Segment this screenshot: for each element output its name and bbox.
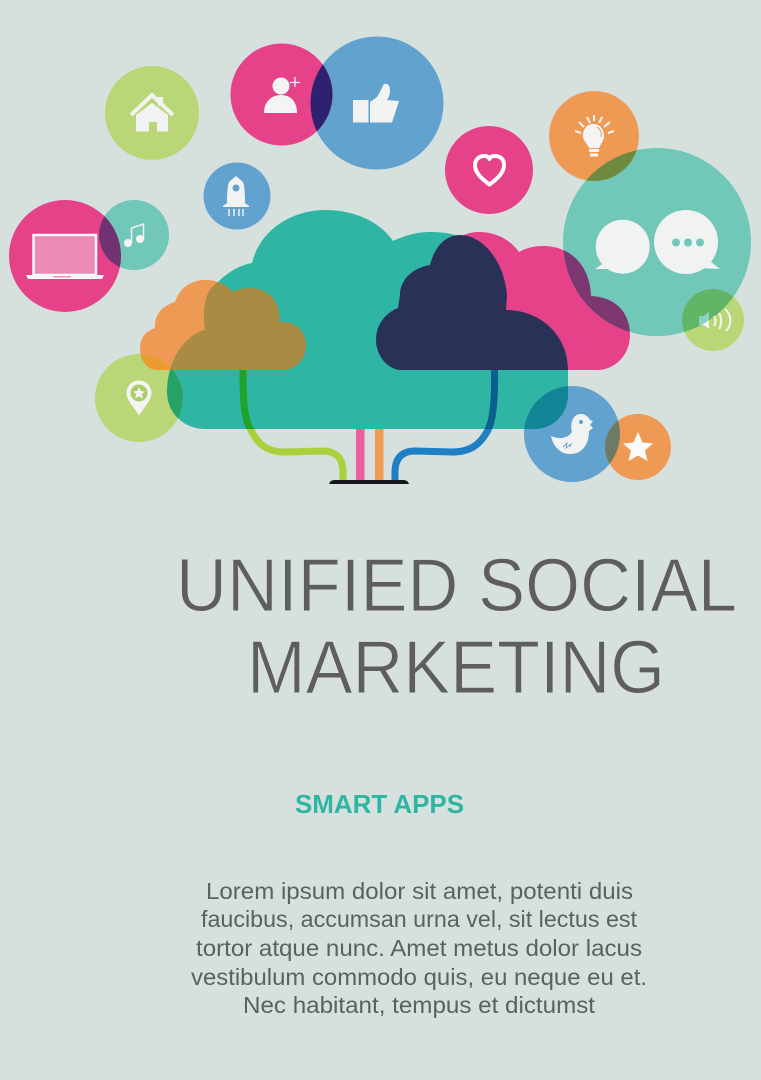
- icon: thumb: [353, 84, 399, 122]
- icon: star: [623, 432, 653, 461]
- cloud: pink: [440, 232, 630, 370]
- bubble: speaker: [682, 289, 744, 351]
- icon: speech bubble right with dots: [654, 210, 720, 274]
- bubble: light bulb: [549, 91, 639, 181]
- overlap with chat bubble: [682, 289, 734, 332]
- title: [176, 543, 737, 709]
- icon: heart: [475, 156, 504, 184]
- overlap with pink cloud: [563, 250, 630, 332]
- icon: laptop: [26, 235, 104, 279]
- overlap with chat bubble: [586, 150, 637, 181]
- bubble: home: [105, 66, 199, 160]
- icon: rocket: [223, 176, 249, 216]
- icon: user plus: [264, 77, 300, 113]
- bubble: bird: [524, 386, 620, 482]
- overlap with orange cloud: [140, 354, 170, 370]
- trunk base: [329, 480, 409, 484]
- subheading: SMART APPS: [295, 789, 464, 819]
- overlap with teal cloud: [524, 386, 568, 429]
- icon: house: [131, 95, 173, 132]
- cloud: orange: [140, 280, 306, 370]
- overlap with teal cloud: [167, 368, 183, 418]
- overlap with thumbs bubble: [310, 64, 332, 132]
- overlap with bird bubble: [605, 420, 620, 464]
- body text: Lorem ipsum dolor sit amet, potenti duis: [206, 878, 633, 904]
- cloud: dark navy: [376, 235, 568, 370]
- title: MARKETING: [247, 625, 665, 709]
- body text: Nec habitant, tempus et dictumst: [243, 992, 595, 1018]
- cloud: large teal: [167, 210, 568, 429]
- icon: bulb: [575, 115, 614, 156]
- icon: speaker: [699, 309, 730, 331]
- body text: vestibulum commodo quis, eu neque eu et.: [191, 964, 647, 990]
- bubble: heart: [445, 126, 533, 214]
- body text: faucibus, accumsan urna vel, sit lectus est: [201, 906, 637, 932]
- cloud: overlap brown: [170, 282, 306, 370]
- trunk lines under the clouds: [243, 370, 495, 482]
- bubble: star: [605, 414, 671, 480]
- bubble: chat: [563, 148, 751, 336]
- bubble: thumbs up: [310, 36, 444, 170]
- trunk lines seen through the teal cloud: [240, 370, 498, 429]
- icon: speech bubble left: [595, 220, 650, 274]
- bubble: music: [99, 200, 169, 270]
- bubble: rocket: [204, 162, 270, 230]
- body text: tortor atque nunc. Amet metus dolor lacus: [196, 935, 642, 961]
- overlap with music bubble: [99, 216, 121, 267]
- icon: bird: [551, 414, 593, 454]
- bubble: location pin: [95, 354, 183, 442]
- bubble: laptop: [9, 200, 121, 312]
- icon: music notes: [124, 224, 144, 247]
- bubble: add user: [230, 44, 332, 146]
- body text: [191, 878, 647, 1018]
- icon: pin: [126, 380, 152, 416]
- title: UNIFIED SOCIAL: [176, 543, 737, 627]
